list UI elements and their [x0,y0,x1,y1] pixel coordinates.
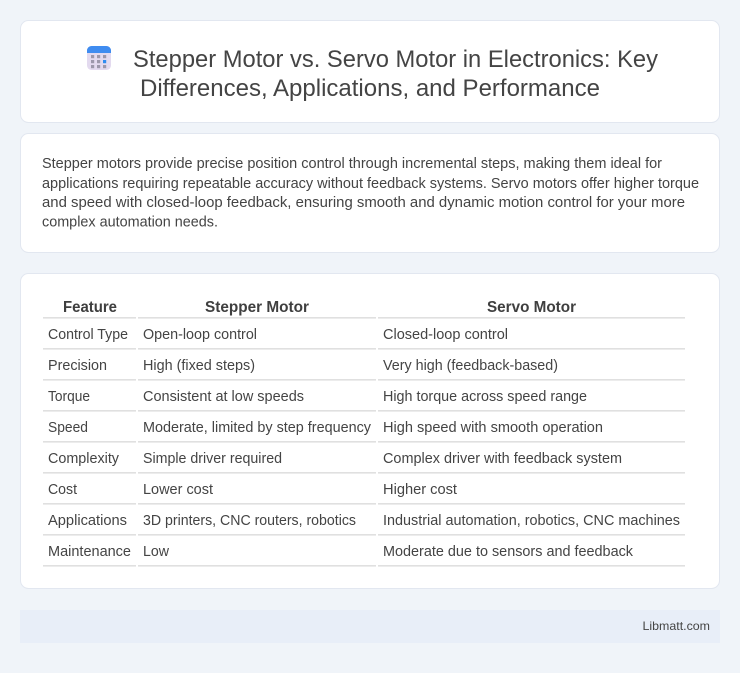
row: complexity: Simple driver required [143,451,282,467]
intro paragraph: and speed with closed-loop feedback, ensuring smooth and dynamic motion control for your more [42,195,685,211]
row: speed [48,420,603,436]
row: precision: Precision [48,358,107,374]
row: control type [48,327,508,343]
row: maintenance [48,544,634,560]
intro paragraph: Stepper motors provide precise position control through incremental steps, making them ideal for [42,156,662,172]
row: applications: Industrial automation, robotics, CNC machines [383,513,680,529]
row: maintenance: Moderate due to sensors and feedback [383,544,634,560]
title: Differences, Applications, and Performance [140,75,600,102]
row: torque: Torque [48,389,90,405]
row: complexity: Complex driver with feedback system [383,451,622,467]
table header: Servo Motor [487,299,576,316]
icon: calendar [87,46,111,70]
row: cost: Lower cost [143,482,213,498]
row: applications [48,513,680,529]
row: torque: Consistent at low speeds [143,389,304,405]
intro paragraph [42,156,699,230]
row: speed: Speed [48,420,88,436]
row: cost [48,482,457,498]
table header: Feature [63,299,117,316]
row: speed: Moderate, limited by step frequency [143,420,372,436]
panel: intro text [20,134,720,252]
row: maintenance: Maintenance [48,544,131,560]
row: speed: High speed with smooth operation [383,420,603,436]
row: complexity: Complexity [48,451,120,467]
panel: title card [20,20,720,122]
intro paragraph: complex automation needs. [42,214,218,230]
row: cost: Higher cost [383,482,457,498]
row: control type: Open-loop control [143,327,257,343]
title: Stepper Motor vs. Servo Motor in Electronics: Key [133,46,658,73]
row: applications: 3D printers, CNC routers, robotics [143,513,356,529]
table header: Stepper Motor [205,299,309,316]
row: torque: High torque across speed range [383,389,587,405]
row: precision: High (fixed steps) [143,358,255,374]
footer: Libmatt.com [642,619,710,633]
panel: comparison table [20,274,720,588]
footer [20,610,720,643]
row: precision: Very high (feedback-based) [383,358,558,374]
row: complexity [48,451,622,467]
row: precision [48,358,558,374]
row: applications: Applications [48,513,127,529]
intro paragraph: applications requiring repeatable accuracy without feedback systems. Servo motors offer higher torque [42,176,699,192]
row: torque [48,389,587,405]
row: control type: Closed-loop control [383,327,508,343]
row: control type: Control Type [48,327,128,343]
row: cost: Cost [48,482,77,498]
table header [63,299,576,316]
table rules [43,317,685,567]
title [133,46,658,102]
row: maintenance: Low [143,544,170,560]
